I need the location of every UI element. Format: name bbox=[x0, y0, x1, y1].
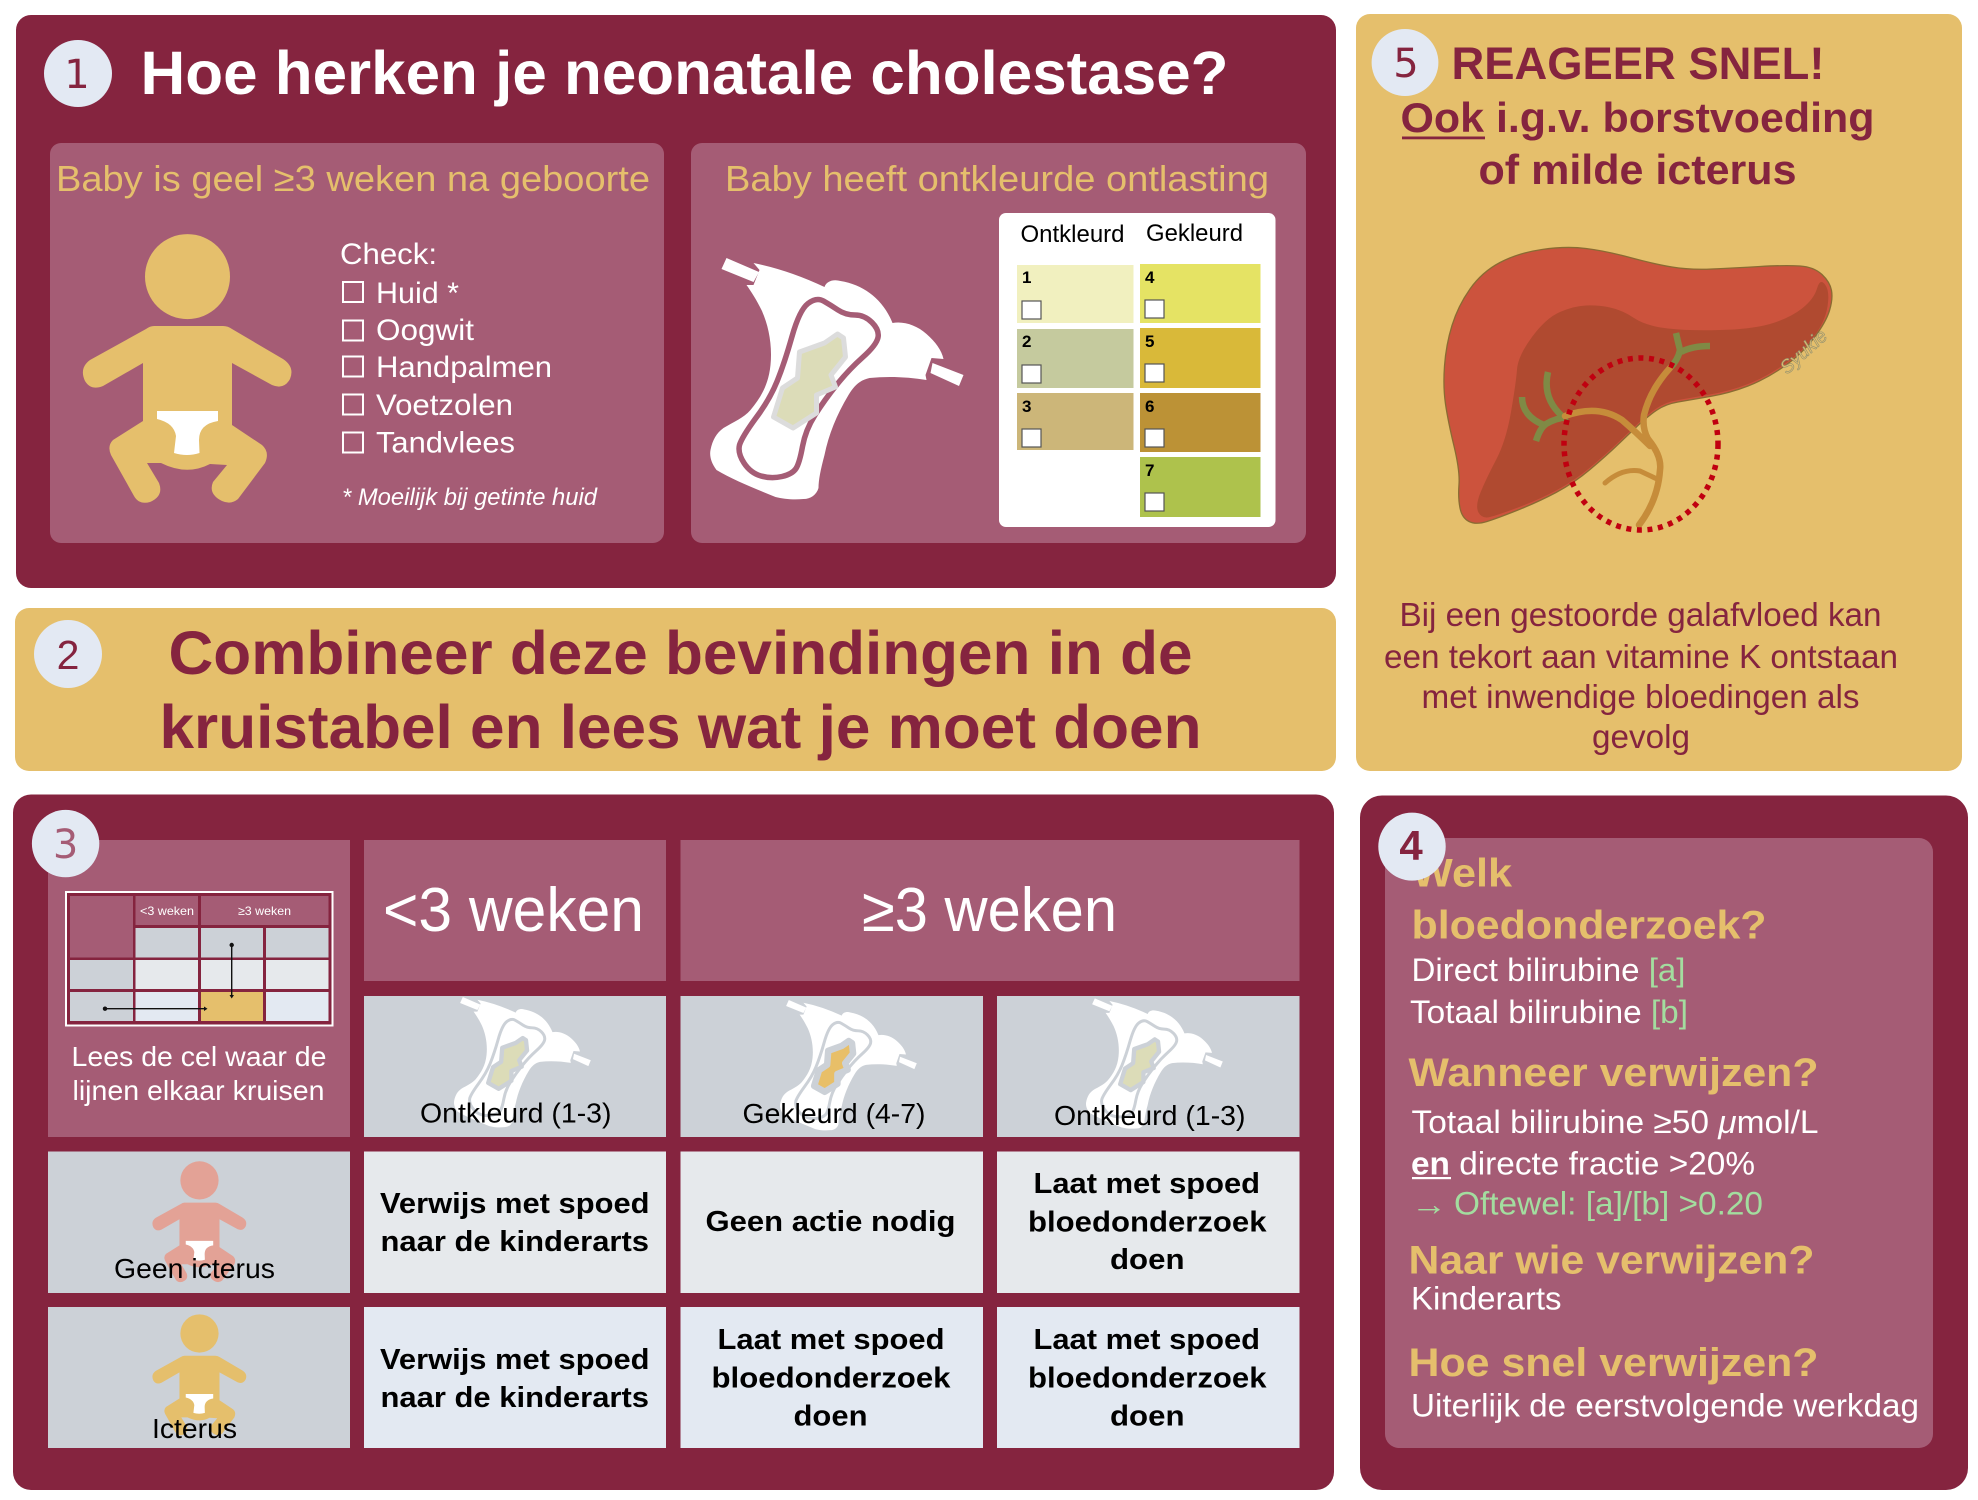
heading bbox=[160, 619, 1202, 761]
cell: no jaundice, discoloured 3 weeks or more: Laat met spoed bbox=[1034, 1168, 1260, 1200]
referral criteria: Totaal bilirubine ≥50 μmol/L bbox=[1412, 1104, 1818, 1140]
referral criteria bbox=[1411, 1104, 1818, 1222]
stool colour chart bbox=[999, 213, 1276, 527]
row header: no jaundice bbox=[48, 1152, 350, 1293]
heading: Ook i.g.v. borstvoeding bbox=[1400, 94, 1874, 141]
cell: jaundice, discoloured 3 weeks or more: doen bbox=[1110, 1400, 1184, 1432]
explanation text: met inwendige bloedingen als bbox=[1422, 678, 1860, 715]
sub header: discoloured, under 3 weeks bbox=[364, 996, 666, 1137]
cell: no jaundice, discoloured 3 weeks or more: bloedonderzoek bbox=[1028, 1206, 1267, 1238]
blood test list: Totaal bilirubine [b] bbox=[1410, 994, 1688, 1030]
illustration: liver and bile ducts: Syukie bbox=[1776, 326, 1832, 379]
cell: no jaundice, discoloured under 3 weeks: Verwijs met spoed bbox=[380, 1188, 650, 1220]
sub header: coloured: Gekleurd (4-7) bbox=[742, 1098, 926, 1129]
explanation text: Bij een gestoorde galafvloed kan bbox=[1400, 596, 1882, 633]
panel 1: recognise cholestasis bbox=[16, 15, 1336, 588]
cell: no jaundice, discoloured 3 weeks or more bbox=[997, 1152, 1300, 1293]
cell: no jaundice, discoloured 3 weeks or more: doen bbox=[1110, 1244, 1184, 1276]
icon: baby bbox=[83, 234, 291, 503]
cell: jaundice, discoloured under 3 weeks: naar de kinderarts bbox=[380, 1382, 649, 1414]
number badge 3 bbox=[32, 810, 99, 877]
panel 3: cross table bbox=[13, 794, 1334, 1490]
cell: no jaundice, coloured: Geen actie nodig bbox=[706, 1206, 956, 1238]
reading instruction: Lees de cel waar de bbox=[72, 1041, 326, 1072]
footnote: * Moeilijk bij getinte huid bbox=[342, 484, 598, 511]
explanation text: gevolg bbox=[1592, 718, 1690, 755]
checklist: Handpalmen bbox=[376, 351, 552, 384]
heading: how fast: Hoe snel verwijzen? bbox=[1408, 1341, 1818, 1385]
mini table: ≥3 weken bbox=[238, 904, 291, 918]
heading: when to refer: Wanneer verwijzen? bbox=[1408, 1051, 1818, 1095]
heading: which blood test bbox=[1412, 852, 1766, 948]
legend cell: how to read bbox=[48, 840, 350, 1137]
number badge 1 bbox=[44, 40, 112, 107]
reading instruction: lijnen elkaar kruisen bbox=[72, 1075, 324, 1106]
referral criteria: en directe fractie >20% bbox=[1411, 1146, 1755, 1182]
stool colour chart: Gekleurd bbox=[1146, 220, 1243, 247]
cell: jaundice, discoloured 3 weeks or more bbox=[997, 1307, 1300, 1448]
cell: jaundice, coloured bbox=[680, 1307, 983, 1448]
heading: Baby heeft ontkleurde ontlasting bbox=[725, 158, 1269, 199]
cell: jaundice, discoloured 3 weeks or more: Laat met spoed bbox=[1034, 1324, 1260, 1356]
number badge 4: 4 bbox=[1399, 822, 1423, 869]
blood test list bbox=[1410, 952, 1688, 1030]
cell: no jaundice, coloured bbox=[680, 1152, 983, 1293]
heading: Baby is geel ≥3 weken na geboorte bbox=[56, 158, 650, 199]
panel 5: act fast bbox=[1356, 14, 1962, 771]
panel 4: blood test and referral bbox=[1360, 796, 1968, 1490]
column header: under 3 weeks bbox=[364, 840, 666, 981]
illustration: liver and bile ducts bbox=[1444, 247, 1832, 530]
number badge 3: 3 bbox=[53, 822, 78, 868]
heading: kruistabel en lees wat je moet doen bbox=[160, 693, 1202, 761]
stool colour chart: 2 bbox=[1022, 332, 1031, 351]
column header: under 3 weeks: <3 weken bbox=[383, 876, 644, 945]
checklist: Voetzolen bbox=[376, 389, 513, 422]
title: Hoe herken je neonatale cholestase? bbox=[140, 39, 1228, 107]
checklist: Huid * bbox=[376, 277, 459, 310]
stool colour chart: 3 bbox=[1022, 397, 1031, 416]
cell: jaundice, coloured: bloedonderzoek bbox=[712, 1362, 951, 1394]
heading: which blood test: Welk bbox=[1412, 852, 1513, 896]
stool colour chart: 4 bbox=[1145, 268, 1155, 287]
number badge 5: 5 bbox=[1393, 41, 1419, 87]
heading: REAGEER SNEL! bbox=[1452, 38, 1824, 89]
cell: jaundice, discoloured under 3 weeks bbox=[364, 1307, 666, 1448]
sub header: discoloured, 3 weeks or more bbox=[997, 996, 1300, 1137]
cell: jaundice, coloured: doen bbox=[794, 1400, 868, 1432]
stool colour chart: 5 bbox=[1145, 332, 1154, 351]
panel: discoloured stool bbox=[691, 143, 1306, 543]
checklist: Check: bbox=[340, 238, 437, 271]
number badge 1: 1 bbox=[64, 52, 90, 98]
heading: Combineer deze bevindingen in de bbox=[168, 619, 1192, 687]
sub header: discoloured, under 3 weeks: Ontkleurd (1-3) bbox=[420, 1098, 612, 1128]
mini table: <3 weken bbox=[140, 904, 194, 918]
number badge 2: 2 bbox=[57, 632, 79, 678]
cell: jaundice, coloured: Laat met spoed bbox=[718, 1324, 944, 1356]
number badge 4 bbox=[1378, 813, 1446, 881]
stool colour chart: 6 bbox=[1145, 397, 1154, 416]
stool colour chart: Ontkleurd bbox=[1020, 221, 1124, 248]
blood test list: Direct bilirubine [a] bbox=[1412, 952, 1686, 988]
number badge 5 bbox=[1372, 29, 1438, 96]
icon: diaper bbox=[710, 258, 964, 499]
row header: jaundice: Icterus bbox=[152, 1413, 237, 1444]
cell: no jaundice, discoloured under 3 weeks bbox=[364, 1152, 666, 1293]
cell: no jaundice, discoloured under 3 weeks: naar de kinderarts bbox=[380, 1226, 649, 1258]
referral criteria: → bbox=[1411, 1186, 1447, 1222]
checklist: Oogwit bbox=[376, 314, 475, 347]
checklist: Tandvlees bbox=[376, 426, 515, 460]
heading: which blood test: bloedonderzoek? bbox=[1412, 904, 1766, 948]
referral criteria: Oftewel: [a]/[b] >0.20 bbox=[1454, 1186, 1763, 1222]
panel 2: combine findings bbox=[15, 608, 1336, 771]
explanation text: een tekort aan vitamine K ontstaan bbox=[1384, 638, 1898, 675]
row header: jaundice bbox=[48, 1307, 350, 1448]
answer: next working day: Uiterlijk de eerstvolgende werkdag bbox=[1411, 1388, 1919, 1424]
explanation text bbox=[1384, 596, 1898, 755]
cell: jaundice, discoloured 3 weeks or more: bloedonderzoek bbox=[1028, 1362, 1267, 1394]
column header: 3 weeks or more bbox=[680, 840, 1300, 981]
cell: jaundice, discoloured under 3 weeks: Verwijs met spoed bbox=[380, 1344, 650, 1376]
sub header: discoloured, 3 weeks or more: Ontkleurd (1-3) bbox=[1054, 1100, 1246, 1131]
heading: refer to whom: Naar wie verwijzen? bbox=[1408, 1238, 1814, 1282]
panel: baby is yellow bbox=[50, 143, 664, 543]
mini table bbox=[66, 892, 332, 1026]
heading: of milde icterus bbox=[1478, 146, 1796, 193]
reading instruction bbox=[72, 1041, 326, 1106]
row header: no jaundice: Geen icterus bbox=[114, 1253, 275, 1284]
sub header: coloured bbox=[680, 996, 983, 1137]
answer: paediatrician: Kinderarts bbox=[1411, 1280, 1562, 1316]
column header: 3 weeks or more: ≥3 weken bbox=[862, 876, 1117, 945]
number badge 2 bbox=[34, 620, 102, 688]
stool colour chart: 1 bbox=[1022, 268, 1031, 287]
checklist bbox=[340, 238, 552, 460]
heading bbox=[1400, 38, 1874, 193]
stool colour chart: 7 bbox=[1145, 461, 1154, 480]
